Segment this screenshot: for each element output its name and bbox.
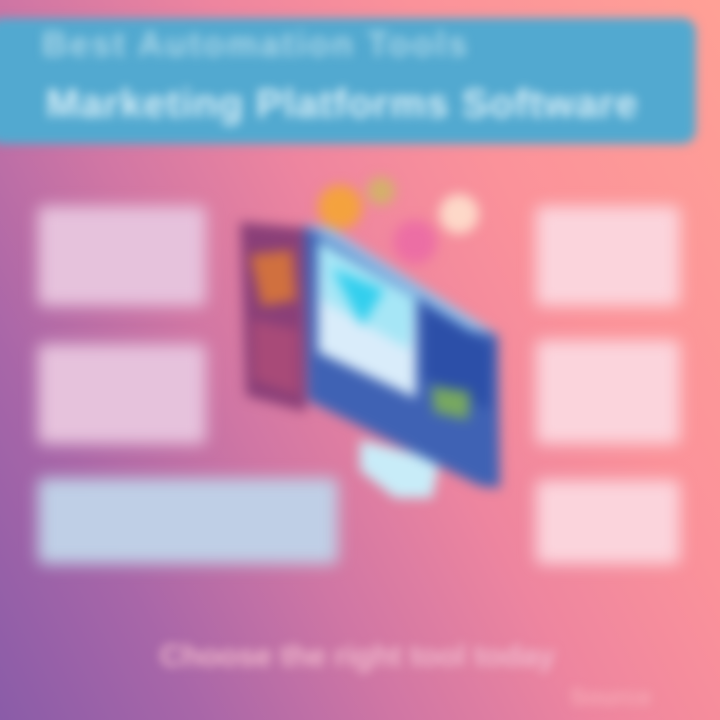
phone device [240, 222, 306, 412]
title text [38, 25, 642, 132]
title text: Best Automation Tools [42, 25, 469, 64]
floating pink icon [393, 220, 437, 264]
panel: left card 1 [38, 206, 206, 306]
panel: right card 2 [536, 340, 680, 444]
floating green icon [367, 177, 395, 205]
floating cream icon [439, 194, 479, 234]
title text: Marketing Platforms Software [46, 82, 639, 126]
footer text: Choose the right tool today [160, 638, 555, 673]
footer note: Source [570, 684, 651, 711]
title banner [0, 18, 696, 144]
floating orange icon [318, 185, 362, 229]
panel: right card 1 [536, 206, 680, 306]
monitor stand [360, 440, 440, 498]
panel: left wide card [38, 478, 338, 564]
panel: right card 3 [536, 480, 680, 564]
panel: left card 2 [38, 344, 206, 444]
monitor [304, 225, 500, 488]
